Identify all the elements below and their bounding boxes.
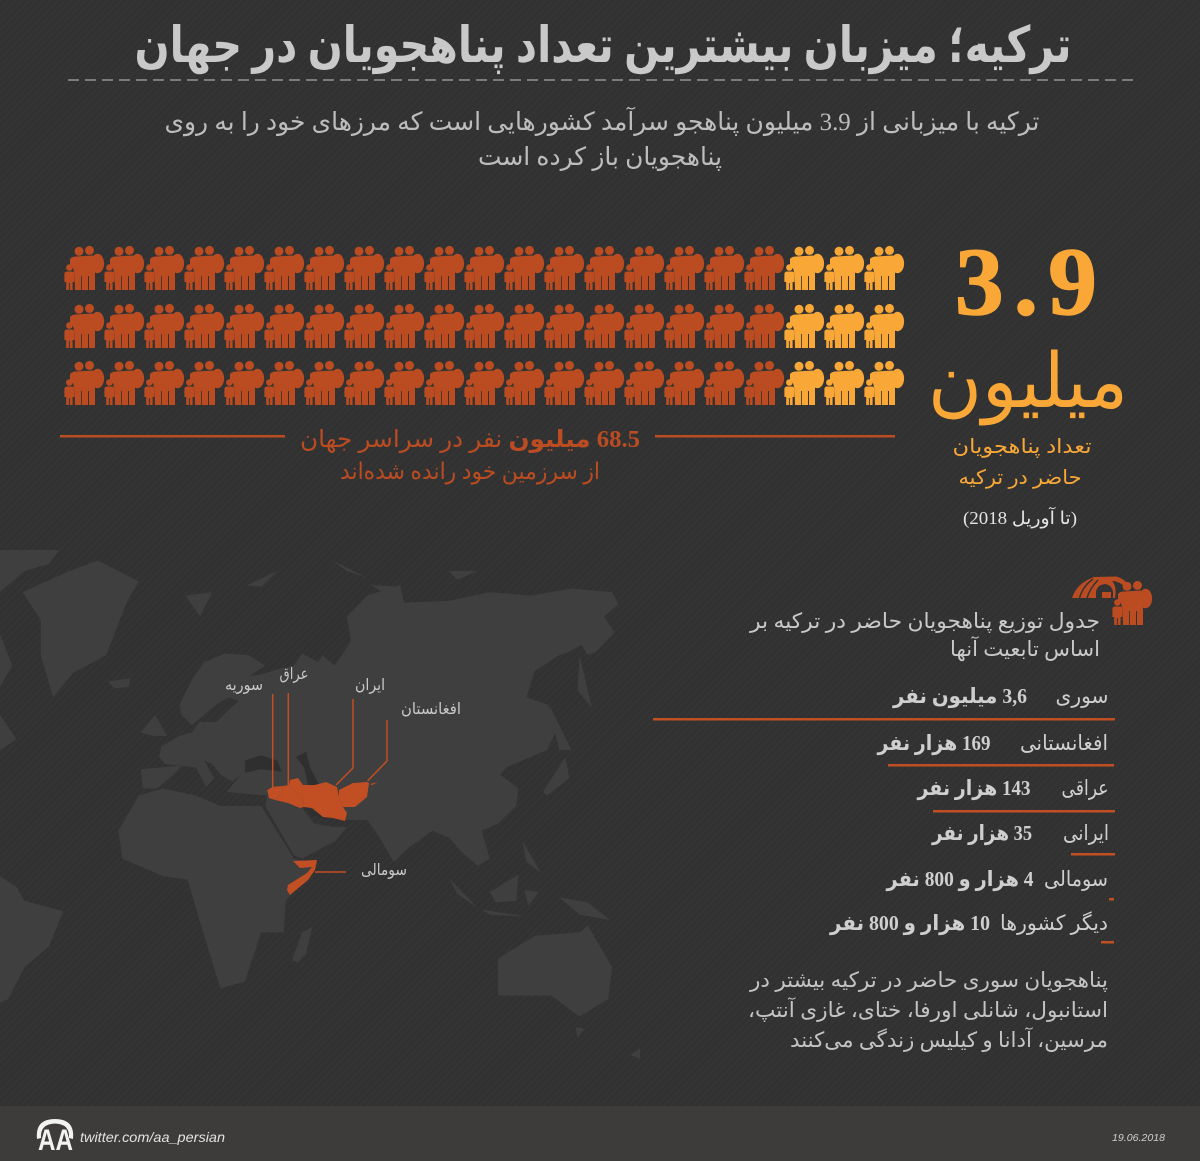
row: other countries [829,911,1114,944]
row: Syrian: سوری [1056,684,1108,708]
map labels: افغانستان [401,701,461,718]
map labels: ایران [355,677,385,695]
big number callout: حاضر در ترکیه [958,467,1082,489]
row 2 of family icons [64,304,904,348]
date note: (تا آوریل 2018) [963,506,1077,529]
highlighted country: Somalia [287,860,317,895]
table heading [749,609,1100,661]
closing paragraph: پناهجویان سوری حاضر در ترکیه بیشتر در [749,968,1108,992]
row: Iranian: ایرانی [1063,821,1109,845]
highlighted country: Syria [267,786,283,800]
leader lines [273,693,387,872]
global displaced callout: از سرزمین خود رانده شده‌اند [340,459,600,485]
global displaced callout: 68.5 میلیون نفر در سراسر جهان [300,427,640,453]
subtitle: پناهجویان باز کرده است [478,144,722,171]
date: 19.06.2018 [1112,1133,1165,1144]
highlighted country: Afghanistan [339,782,378,807]
table heading: اساس تابعیت آنها [950,636,1100,661]
row: other countries: 10 هزار و 800 نفر [829,911,990,935]
row: Iranian: 35 هزار نفر [931,821,1032,845]
row: Syrian [653,684,1115,720]
row: Afghan [877,731,1114,766]
closing paragraph: مرسین، آدانا و کیلیس زندگی می‌کنند [790,1027,1108,1052]
icon: tent and family [1072,576,1152,625]
big number callout [928,228,1128,489]
big number callout: میلیون [928,340,1128,426]
icon: AA logo: AA [38,1124,73,1157]
row: Somali [886,867,1114,900]
subtitle [165,106,1040,171]
big number callout: 3.9 [955,228,1107,335]
row: Iranian [931,821,1115,856]
row: Afghan: 169 هزار نفر [877,731,990,755]
row: other countries: دیگر کشورها [1000,911,1108,935]
twitter handle: twitter.com/aa_persian [80,1129,225,1145]
highlighted country: Iran [289,778,347,821]
subtitle: ترکیه با میزبانی از 3.9 میلیون پناهجو سرآمد کشورهایی است که مرزهای خود را به روی [165,106,1040,137]
table: refugees by nationality [653,684,1115,944]
row: Afghan: افغانستانی [1020,731,1108,755]
world map [0,550,640,1059]
row: Iraqi: 143 هزار نفر [917,776,1030,800]
row 3 of family icons [64,361,904,405]
row: Iraqi: عراقی [1062,776,1108,800]
closing paragraph: استانبول، شانلی اورفا، ختای، غازی آنتپ، [748,997,1108,1022]
map labels [225,666,461,880]
row: Iraqi [917,776,1115,812]
row 1 of family icons [64,246,904,290]
map labels: سوریه [225,677,263,695]
pictogram: refugee families [64,246,904,405]
footer [0,1106,1200,1161]
map labels: عراق [280,666,308,684]
map labels: سومالی [361,862,407,880]
big number callout: تعداد پناهجویان [952,436,1092,459]
global displaced callout [60,427,895,485]
closing paragraph [748,968,1108,1052]
table heading: جدول توزیع پناهجویان حاضر در ترکیه بر [749,609,1100,633]
row: Somali: 4 هزار و 800 نفر [886,867,1034,891]
row: Somali: سومالی [1044,867,1108,891]
highlighted country: Iraq [275,785,304,808]
row: Syrian: 3,6 میلیون نفر [892,684,1027,708]
